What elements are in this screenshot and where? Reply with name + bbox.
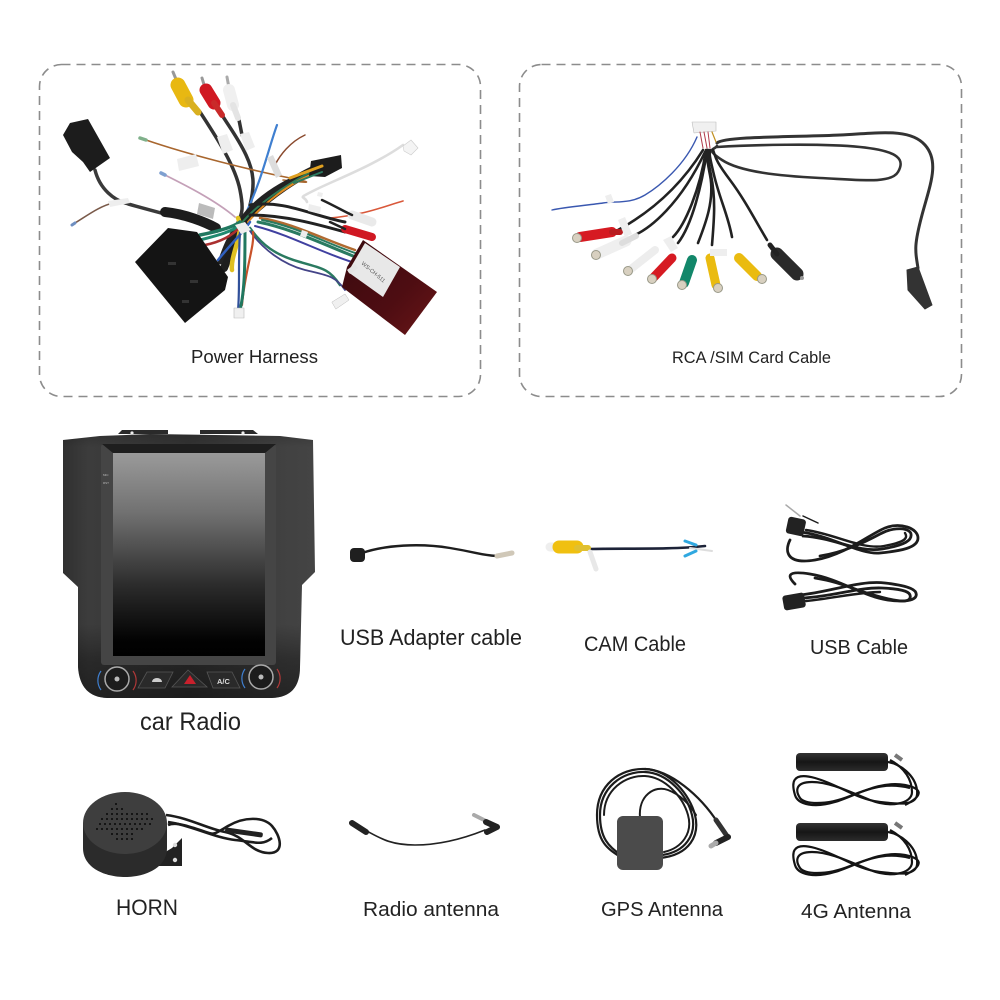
panel: RCA and SIM card cable (520, 64, 962, 396)
lower USB cable (782, 573, 916, 611)
icon: power harness wiring (63, 72, 437, 335)
label: radio antenna: Radio antenna (363, 899, 500, 921)
icon: car radio unit: RST (103, 481, 109, 485)
label: USB adapter cable: USB Adapter cable (340, 625, 522, 650)
label: CAM cable: CAM Cable (584, 633, 686, 656)
panel: power harness (40, 64, 480, 396)
label: horn: HORN (116, 895, 178, 920)
icon: horn speaker (83, 792, 280, 877)
RCA plug white two (624, 250, 655, 276)
control strip: A/C (217, 677, 230, 686)
RCA plug red one (572, 232, 620, 242)
RCA plug red two (648, 236, 678, 284)
label: car radio: car Radio (140, 708, 241, 736)
label: USB cable: USB Cable (810, 637, 908, 659)
black fan-out cables (618, 150, 767, 245)
icon: RCA and SIM cable loom (552, 122, 933, 309)
upper antenna (793, 753, 919, 805)
thin signal wires (140, 125, 418, 262)
icon: radio antenna cable (352, 815, 497, 845)
control strip (98, 665, 280, 691)
speaker grille holes (96, 803, 153, 840)
main wire bundle (200, 155, 358, 318)
RCA plug yellow two (739, 258, 766, 284)
long SIM cable with end connector (712, 133, 933, 309)
main black connector (135, 228, 228, 323)
icon: CAM cable (550, 541, 712, 569)
small RCA plugs and red control box: WS-CH-511 (360, 261, 386, 284)
audio jack (770, 245, 804, 280)
icon: 4G antennas (793, 753, 919, 875)
RCA plugs yellow red white (173, 72, 255, 228)
label: power harness: Power Harness (191, 347, 318, 367)
label: GPS antenna: GPS Antenna (601, 899, 724, 921)
RCA plug green (678, 260, 692, 290)
screen (113, 453, 265, 656)
RCA plug white one (592, 217, 636, 260)
upper USB cable (785, 505, 918, 561)
icon: car radio unit (63, 430, 315, 698)
screen bezel (101, 444, 276, 665)
RCA plug yellow one (710, 249, 727, 292)
icon: USB adapter cable (350, 545, 512, 562)
white connector block and blue wire (552, 122, 716, 210)
label: RCA SIM card cable: RCA /SIM Card Cable (672, 349, 831, 367)
label: 4G antenna: 4G Antenna (801, 901, 912, 923)
small RCA plugs and red control box (322, 200, 437, 335)
lower antenna (793, 823, 919, 875)
top left connector and cable (63, 119, 216, 228)
icon: GPS antenna (597, 769, 728, 870)
icon: USB cables (782, 505, 918, 611)
icon: car radio unit: MIC (103, 473, 109, 477)
